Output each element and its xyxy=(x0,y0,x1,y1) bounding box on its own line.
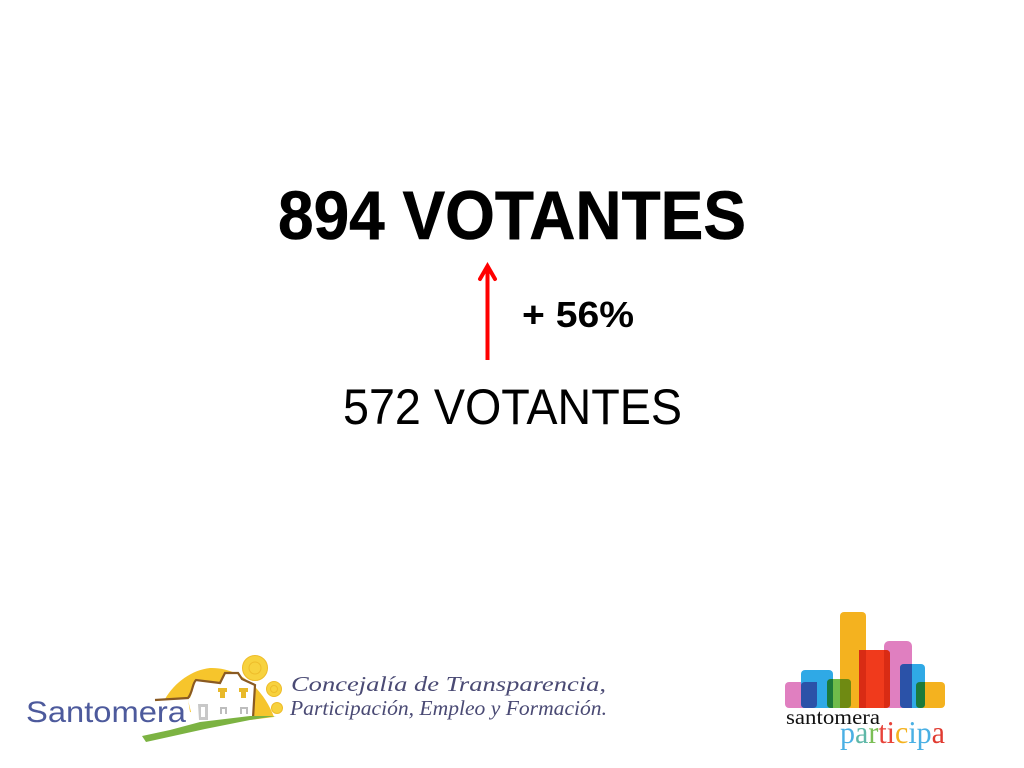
percentage label: + 56% xyxy=(522,294,634,335)
icon: sun xyxy=(165,668,274,720)
icon: windows xyxy=(198,688,248,720)
icon: flowers xyxy=(242,656,282,714)
text: concejalia: Concejalía de Transparencia, xyxy=(291,672,606,696)
icon: green hill xyxy=(142,716,276,742)
wordmark: santomera: santomera xyxy=(786,705,881,729)
logo: santomera participa xyxy=(785,612,945,750)
wordmark: Santomera: Santomera xyxy=(26,696,186,729)
bar chart mark xyxy=(785,612,945,708)
arrow: increase xyxy=(480,266,495,360)
heading: 894 votantes: 894 VOTANTES xyxy=(278,177,746,254)
text: concejalia: Participación, Empleo y Formación. xyxy=(289,696,607,720)
text: concejalia xyxy=(289,672,607,720)
icon: house xyxy=(155,672,255,728)
logo: Santomera xyxy=(26,656,282,742)
wordmark: participa: participa xyxy=(840,714,945,750)
subheading: 572 votantes: 572 VOTANTES xyxy=(343,379,682,435)
house outline xyxy=(155,673,255,718)
